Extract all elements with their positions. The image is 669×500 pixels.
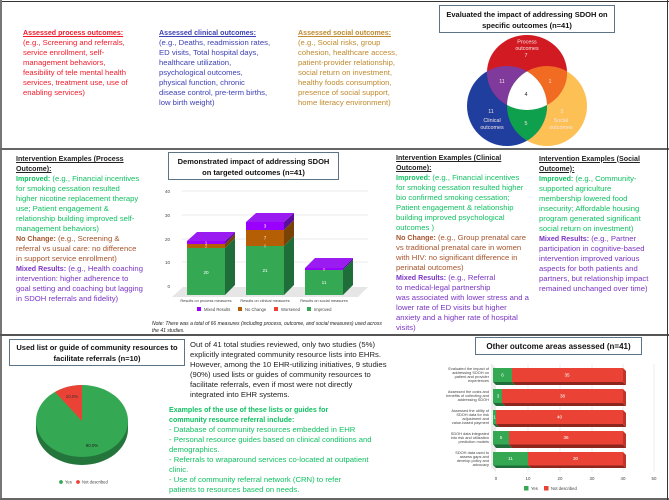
text block: clinical intervention examples: vs traditional prenatal care in women xyxy=(396,243,521,252)
heading: other outcome areas: Other outcome areas assessed (n=41) xyxy=(486,342,631,350)
bar: process measures: 2 xyxy=(205,244,208,249)
stacked 3d bar chart: 30 xyxy=(165,213,170,218)
text block: review summary: However, among the 10 EHR-utilizing initiatives, 9 studies xyxy=(190,360,387,369)
text block: clinical intervention examples: visits) xyxy=(396,323,416,332)
text block: assessed process outcomes: Assessed process outcomes: xyxy=(23,29,123,37)
text block: review summary: integrated into EHR systems. xyxy=(190,390,290,399)
text block: review summary: Out of 41 total studies reviewed, only two studies (5%) xyxy=(190,340,375,349)
text block: clinical intervention examples: outcomes ) xyxy=(396,223,434,232)
text block: examples of lists or guides xyxy=(169,406,372,494)
text block: assessed social outcomes: healthy foods consumption, xyxy=(298,78,392,87)
row labels: benefits of collecting and xyxy=(446,393,489,398)
heading: demonstrated impact: on targeted outcomes (n=41) xyxy=(202,168,305,177)
heading: demonstrated impact: Demonstrated impact of addressing SDOH xyxy=(178,157,329,166)
heading: demonstrated impact xyxy=(168,152,339,180)
text block: examples of lists or guides: - Personal resource guides based on clinical conditions and xyxy=(169,435,372,444)
text block: assessed social outcomes: (e.g., Social risks, group xyxy=(298,38,380,47)
row labels: SDOH data for risk xyxy=(456,412,489,417)
bar row 4: 5 xyxy=(500,435,503,440)
bar: clinical measures: 0 xyxy=(264,244,267,248)
venn diagram: 5 xyxy=(524,121,528,127)
row labels: adjustment and xyxy=(462,416,489,421)
text block: social intervention examples: insecurity; Affordable housing xyxy=(539,204,639,213)
text block: clinical intervention examples: Mixed Results: (e.g., Referral xyxy=(396,273,495,282)
pie legend xyxy=(59,480,109,484)
venn diagram: 4 xyxy=(524,92,528,98)
text block: process intervention examples: in SDOH referrals and fidelity) xyxy=(16,294,118,303)
bar row 4 xyxy=(493,431,626,448)
text block: assessed social outcomes: patient-provider relationship, xyxy=(298,58,395,67)
axis labels: 30 xyxy=(590,476,595,481)
note under bar chart: Note: There was a total of 66 measures (including process, outcome, and social measures) used across xyxy=(152,321,382,327)
chart legend: Not described xyxy=(551,486,578,491)
text block: clinical intervention examples: anxiety and a higher rate of hospital xyxy=(396,313,518,322)
row labels: Assessed the utility of xyxy=(451,408,490,413)
text block: examples of lists or guides: - Database of community resources embedded in EHR xyxy=(169,425,355,434)
venn diagram: 7 xyxy=(524,53,528,59)
axis labels: 10 xyxy=(526,476,531,481)
text block: assessed social outcomes: cohesion, healthcare access, xyxy=(298,48,397,57)
text block: review summary: (90%) used lists or guides of community resources to xyxy=(190,370,371,379)
bar: clinical measures: 21 xyxy=(262,268,268,273)
venn diagram: outcomes xyxy=(480,125,504,131)
text block: social intervention examples: supported agriculture xyxy=(539,184,611,193)
text block: clinical intervention examples xyxy=(396,154,529,332)
bar row 3: 40 xyxy=(557,414,562,420)
text block: process intervention examples: goal setting and coaching but lagging xyxy=(16,284,143,293)
text block: process intervention examples xyxy=(16,155,143,303)
text block: examples of lists or guides: - Use of community referral network (CRN) to refer xyxy=(169,475,341,484)
text block: assessed process outcomes: (e.g., Screening and referrals, xyxy=(23,38,125,47)
row labels: value-based payment xyxy=(452,420,490,425)
note under bar chart: the 41 studies. xyxy=(152,328,185,334)
bar: social measures: 0 xyxy=(323,267,326,272)
heading: list or guide of community resources: facilitate referrals (n=10) xyxy=(54,354,140,363)
text block: clinical intervention examples: Intervention Examples (Clinical xyxy=(396,154,501,162)
text block: clinical intervention examples: perinatal outcomes) xyxy=(396,263,464,272)
text block: assessed social outcomes: social return on investment, xyxy=(298,68,392,77)
text block: social intervention examples: social return on investment) xyxy=(539,224,633,233)
bar: social measures: 11 xyxy=(322,280,327,285)
text block: social intervention examples: partners, but relationship impact xyxy=(539,274,648,283)
row labels: develop policy and xyxy=(457,458,489,463)
text block: process intervention examples: Outcome): xyxy=(16,165,51,173)
row labels: Evaluated the impact of xyxy=(448,366,490,371)
bar row 5: 11 xyxy=(508,456,513,461)
row labels: patient and provider xyxy=(455,374,490,379)
bar: clinical measures: 3 xyxy=(264,224,267,228)
heading: list or guide of community resources xyxy=(9,339,185,366)
stacked 3d bar chart: Results on clinical measures xyxy=(240,298,290,303)
row labels: SDOH data integrated xyxy=(451,431,489,436)
text block: assessed social outcomes: presence of social support, xyxy=(298,88,390,97)
text block: social intervention examples xyxy=(539,154,648,293)
bar row 5 xyxy=(493,452,626,468)
text block: process intervention examples: higher nicotine replacement therapy xyxy=(16,194,138,203)
text block: assessed clinical outcomes: (e.g., Deaths, readmission rates, xyxy=(159,38,270,47)
row labels: prediction models xyxy=(458,439,489,444)
text block: process intervention examples: for smoking cessation resulted xyxy=(16,184,120,193)
text block: assessed clinical outcomes: psychological outcomes, xyxy=(159,68,243,77)
stacked 3d bar chart: 0 xyxy=(167,284,170,289)
bar row 1: 6 xyxy=(501,372,504,378)
heading: evaluated impact: specific outcomes (n=41) xyxy=(482,21,572,30)
text block: clinical intervention examples: Improved: (e.g., Financial incentives xyxy=(396,173,519,182)
bar: process measures: 20 xyxy=(203,270,209,275)
pie legend: Not described xyxy=(82,480,109,484)
text block: assessed clinical outcomes: physical function, chronic xyxy=(159,78,245,87)
text block: examples of lists or guides: patients to resources based on needs. xyxy=(169,485,299,494)
text block: clinical intervention examples: for smoking cessation resulted higher xyxy=(396,183,523,192)
text block: clinical intervention examples: with HIV: no significant difference in xyxy=(396,253,517,262)
text block: assessed clinical outcomes: disease control, pre-term births, xyxy=(159,88,267,97)
venn diagram: 11 xyxy=(499,79,505,85)
text block: process intervention examples: relationship building improved self- xyxy=(16,214,134,223)
text block: clinical intervention examples: to medical-legal partnership xyxy=(396,283,490,292)
text block: process intervention examples: Intervention Examples (Process xyxy=(16,155,124,163)
axis labels: 0 xyxy=(495,476,498,481)
chart legend: Yes xyxy=(531,486,538,491)
text block: assessed process outcomes: enabling services) xyxy=(23,88,85,97)
text block: process intervention examples: management behaviors) xyxy=(16,224,99,233)
chart legend: Worsened xyxy=(281,307,301,312)
text block: review summary xyxy=(190,340,387,399)
pie chart: 10.0% xyxy=(66,394,78,399)
text block: assessed process outcomes xyxy=(23,29,128,97)
text block: assessed clinical outcomes: ED visits, Total hospital days, xyxy=(159,48,258,57)
bar row 2: 38 xyxy=(560,394,565,398)
text block: process intervention examples: intervention: higher adherence to xyxy=(16,274,128,283)
text block: clinical intervention examples: No Change: (e.g., Group prenatal care xyxy=(396,233,526,242)
text block: clinical intervention examples: was associated with lower stress and a xyxy=(396,293,529,302)
stacked 3d bar chart: 20 xyxy=(165,237,170,242)
text block: social intervention examples: remained unchanged over time) xyxy=(539,284,648,293)
heading: evaluated impact xyxy=(439,5,615,33)
text block: assessed process outcomes: management behaviors, xyxy=(23,58,105,67)
axis labels: 20 xyxy=(558,476,563,481)
text block: social intervention examples: Intervention Examples (Social xyxy=(539,154,640,162)
chart legend: No Change xyxy=(245,307,267,312)
chart legend: Improved xyxy=(314,307,332,312)
text block: examples of lists or guides: clinic. xyxy=(169,465,188,474)
venn diagram: 11 xyxy=(488,109,494,115)
stacked 3d bar chart: 10 xyxy=(165,260,170,265)
text block: process intervention examples: in support service enrollment) xyxy=(16,254,117,263)
bar row 2 xyxy=(493,389,626,406)
text block: assessed process outcomes: service enrollment, self- xyxy=(23,48,104,57)
text block: assessed clinical outcomes: low birth weight) xyxy=(159,98,215,107)
text block: process intervention examples: Mixed Results: (e.g., Health coaching xyxy=(16,264,143,273)
axis labels: 40 xyxy=(621,476,626,481)
bar row 3 xyxy=(493,410,626,427)
text block: social intervention examples: Outcome): xyxy=(539,165,574,173)
row labels: into risk and utilization xyxy=(451,435,489,440)
bar: process measures: 1 xyxy=(205,240,208,246)
bar row 2: 3 xyxy=(497,394,500,398)
text block: social intervention examples: program generated significant xyxy=(539,214,641,223)
row labels: experiences xyxy=(468,378,489,383)
bar row 1 xyxy=(493,368,626,385)
bar: process measures xyxy=(187,232,235,295)
venn diagram xyxy=(467,35,587,146)
chart legend xyxy=(524,486,578,491)
text block: clinical intervention examples: Patient engagement & relationship xyxy=(396,203,514,212)
bar row 1: 35 xyxy=(564,372,570,378)
text block: social intervention examples: Improved: (e.g., Community- xyxy=(539,174,637,183)
text block: clinical intervention examples: lower rate of ED visits but higher xyxy=(396,303,507,312)
text block: examples of lists or guides: Examples of the use of these lists or guides for xyxy=(169,406,328,414)
text block: social intervention examples: aspects for both patients and xyxy=(539,264,638,273)
text block: assessed clinical outcomes xyxy=(159,29,270,107)
text block: assessed social outcomes xyxy=(298,29,397,107)
axis labels xyxy=(495,476,657,481)
text block: assessed social outcomes: home literacy environment) xyxy=(298,98,391,107)
text block: social intervention examples: intervention improved various xyxy=(539,254,639,263)
text block: clinical intervention examples: building improved psychological xyxy=(396,213,505,222)
text block: review summary: facilitate referrals, even if most were not directly xyxy=(190,380,352,389)
bar: clinical measures xyxy=(246,213,294,295)
venn diagram: outcomes xyxy=(515,46,539,52)
note under bar chart xyxy=(152,321,382,334)
row labels: advocacy xyxy=(473,462,489,467)
venn diagram: 1 xyxy=(548,79,552,85)
bar row 4: 36 xyxy=(563,435,569,440)
pie legend: Yes xyxy=(65,480,72,484)
text block: review summary: explicitly integrated community resource lists into EHRs. xyxy=(190,350,381,359)
row labels: addressing SDOH xyxy=(458,397,489,402)
venn diagram: outcomes xyxy=(549,125,573,131)
row labels xyxy=(446,366,490,467)
text block: process intervention examples: Improved: (e.g., Financial incentives xyxy=(16,174,139,183)
text block: assessed social outcomes: Assessed social outcomes: xyxy=(298,29,391,37)
text block: process intervention examples: referral vs usual care: no difference xyxy=(16,244,136,253)
bar: clinical measures: 7 xyxy=(264,236,267,240)
heading: evaluated impact: Evaluated the impact of addressing SDOH on xyxy=(446,10,608,19)
heading: other outcome areas xyxy=(475,337,642,355)
text block: assessed process outcomes: services, treatment use, use of xyxy=(23,78,128,87)
venn diagram: 2 xyxy=(560,109,564,115)
chart legend: Mixed Results xyxy=(204,307,230,312)
text block: assessed clinical outcomes: healthcare utilization, xyxy=(159,58,231,67)
bar row 5: 30 xyxy=(573,456,578,461)
axis labels: 50 xyxy=(652,476,657,481)
text block: clinical intervention examples: Outcome): xyxy=(396,164,431,172)
text block: process intervention examples: use; Patient engagement & xyxy=(16,204,109,213)
bar row 3: 1 xyxy=(493,414,496,420)
text block: examples of lists or guides: demographics. xyxy=(169,445,219,454)
stacked 3d bar chart: 40 xyxy=(165,189,170,194)
chart legend xyxy=(197,307,332,312)
heading: list or guide of community resources: Used list or guide of community resources to xyxy=(16,343,178,352)
venn diagram: Clinical xyxy=(483,118,501,124)
stacked 3d bar chart: Results on process measures xyxy=(180,298,232,303)
venn diagram: Process xyxy=(517,40,537,46)
text block: examples of lists or guides: - Referrals to wraparound services co-located at outpatient xyxy=(169,455,369,464)
text block: social intervention examples: membership lowered food xyxy=(539,194,627,203)
text block: social intervention examples: participation in cognitive-based xyxy=(539,244,645,253)
text block: clinical intervention examples: bio confirmed smoking cessation; xyxy=(396,193,510,202)
text block: assessed process outcomes: feasibility of tele mental health xyxy=(23,68,126,77)
stacked 3d bar chart: Results on social measures xyxy=(300,298,348,303)
text block: assessed clinical outcomes: Assessed clinical outcomes: xyxy=(159,29,256,37)
text block: social intervention examples: Mixed Results: (e.g., Partner xyxy=(539,234,636,243)
row labels: Assessed the costs and xyxy=(448,389,489,394)
venn diagram: Social xyxy=(554,118,568,124)
pie chart: 90.0% xyxy=(86,443,98,448)
text block: process intervention examples: No Change: (e.g., Screening & xyxy=(16,234,119,243)
row labels: assess gaps and xyxy=(460,454,489,459)
row labels: addressing SDOH on xyxy=(452,370,489,375)
text block: examples of lists or guides: community resource referral include: xyxy=(169,416,294,424)
bar: social measures xyxy=(305,258,353,295)
row labels: SDOH data used to xyxy=(455,450,489,455)
